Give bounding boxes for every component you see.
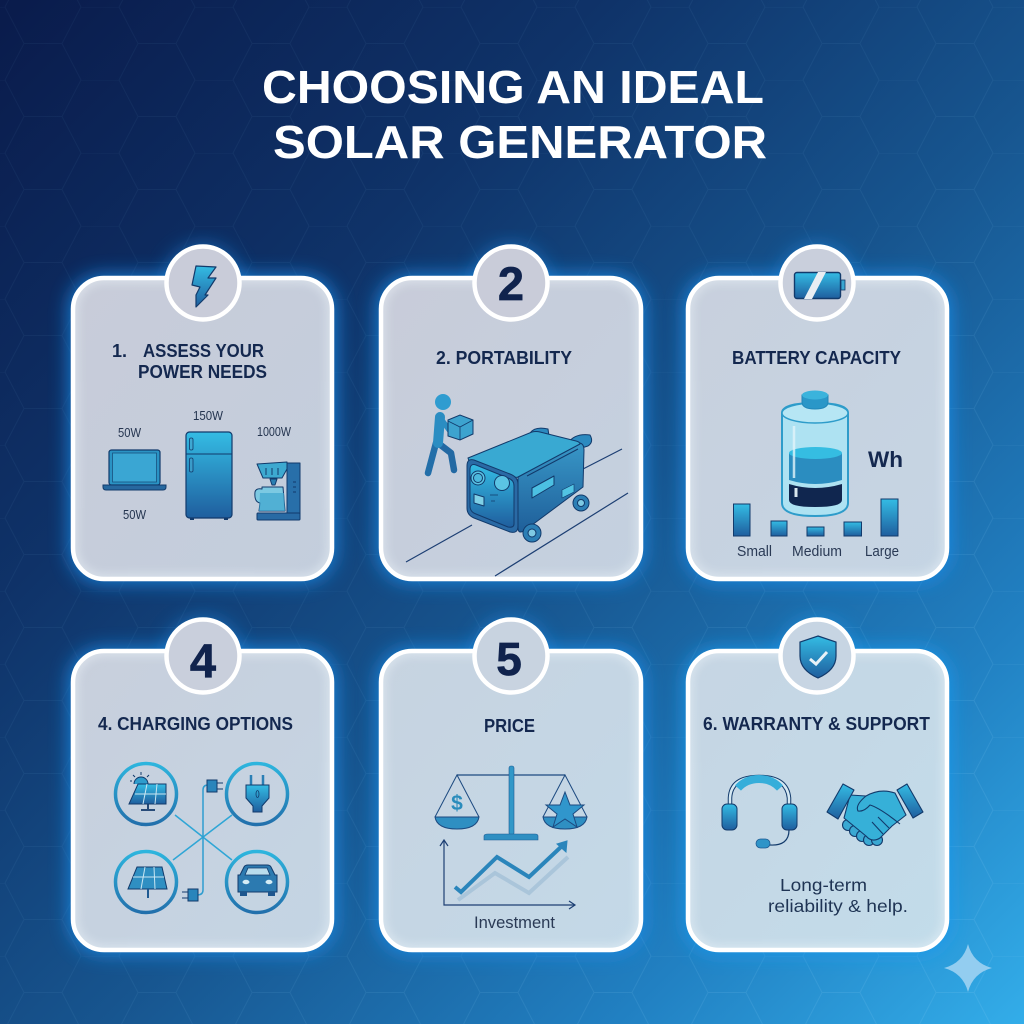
title: SOLAR GENERATOR [273,116,767,168]
icon: solar generator on wheels [467,428,592,542]
badge: number 5: 5 [496,633,522,685]
heading: 6. WARRANTY & SUPPORT [703,714,930,734]
panel: warranty and support [685,618,950,953]
icon: ground solar panel [116,852,176,912]
icon: battery cylinder [782,390,848,516]
icon: lightning badge [166,246,240,320]
badge: number 4: 4 [190,634,216,687]
icon: headset [722,777,797,848]
icon: sun and solar panel [116,764,176,824]
connector lines [173,815,232,860]
panel: portability [378,245,644,582]
label: 150W: 150W [193,409,223,423]
icon: battery badge [780,246,854,320]
icon: upper plug connector [207,780,223,792]
label: Investment: Investment [474,914,555,932]
label: 1000W: 1000W [257,425,291,439]
caption [768,875,908,916]
panel: price [378,618,644,953]
axis labels: Small [737,544,772,560]
caption: reliability & help. [768,896,908,916]
heading [112,341,267,382]
axis labels: Large [865,544,899,560]
line chart: investment [440,840,575,909]
bar chart: capacity sizes [734,499,898,536]
heading: POWER NEEDS [138,362,267,382]
icon: lower plug connector [182,889,198,901]
heading: BATTERY CAPACITY [732,348,901,368]
heading: PRICE [484,716,535,736]
label: second 50W: 50W [123,508,146,522]
label: 50W: 50W [118,426,141,440]
panel: charging options [70,618,335,953]
panel: battery capacity [685,245,950,582]
icon: balance scale: $ [451,792,463,815]
icon: shield badge [780,620,854,692]
title [262,61,767,168]
caption: Long-term [780,875,867,895]
icon: fridge [186,432,232,520]
panel: assess your power needs [70,245,335,582]
badge: number 2: 2 [498,257,524,310]
badge: number 5 [474,620,548,692]
title: CHOOSING AN IDEAL [262,61,764,113]
heading: 1. [112,341,127,361]
heading: 2. PORTABILITY [436,348,572,368]
heading: ASSESS YOUR [143,341,264,361]
axis labels [737,544,899,560]
icon: laptop [103,450,166,490]
icon: handshake [827,784,923,846]
label: Wh: Wh [868,447,903,472]
badge: number 2 [474,246,548,320]
icon: power plug [226,764,288,824]
icon: person carrying box [428,394,473,473]
icon: sparkle [944,944,992,992]
heading: 4. CHARGING OPTIONS [98,714,293,734]
icon: car [226,852,288,912]
icon: balance scale [435,766,587,840]
axis labels: Medium [792,544,842,560]
badge: number 4 [166,620,240,692]
road lines [406,449,628,576]
icon: coffee maker [255,462,300,520]
